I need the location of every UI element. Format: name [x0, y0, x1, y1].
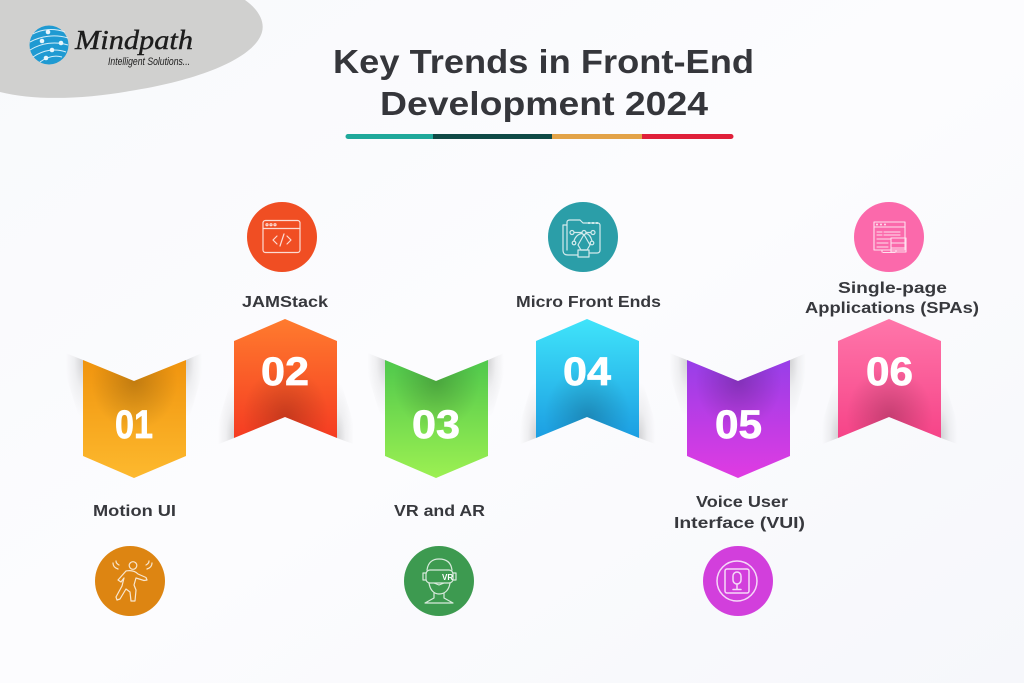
ribbon 04: 04: [563, 350, 612, 394]
ribbon 03: [385, 360, 488, 478]
logo: Mindpath globe: [30, 26, 68, 64]
ribbon 01: 01: [115, 403, 153, 447]
logo wordmark: Mindpath: [74, 25, 193, 55]
icon: walking person: [95, 546, 165, 616]
icon: VR headset: VR: [442, 573, 453, 582]
label: Single-page: [838, 280, 947, 297]
title: [333, 44, 754, 123]
ribbon 06: 06: [866, 350, 913, 394]
icon: voice assistant microphone: [703, 546, 773, 616]
step 04: Micro Front Ends: [513, 202, 663, 447]
icon: monitor with code and server: [854, 202, 924, 272]
step 03: VR and AR: [360, 350, 511, 616]
logo tagline: Intelligent Solutions...: [108, 56, 190, 68]
label: Micro Front Ends: [516, 294, 661, 311]
title underline: [346, 134, 734, 139]
logo panel: grey ellipse: [0, 0, 263, 98]
label: [805, 280, 979, 317]
label: Applications (SPAs): [805, 300, 979, 317]
ribbon 01: [83, 360, 186, 478]
icon: VR headset: [404, 546, 474, 616]
label: [674, 494, 805, 532]
step 01: Motion UI: [58, 350, 209, 616]
icon: code window: [247, 202, 317, 272]
ribbon 02: 02: [261, 350, 309, 394]
title: Key Trends in Front-End: [333, 44, 754, 81]
ribbon 02: [234, 319, 337, 438]
label: Interface (VUI): [674, 515, 805, 532]
ribbon 03: 03: [412, 403, 460, 447]
title: Development 2024: [380, 86, 708, 123]
ribbon 04: [536, 319, 639, 438]
label: JAMStack: [242, 294, 328, 311]
step 05: Voice User Interface: [662, 350, 813, 616]
step 02: JAMStack: [211, 202, 361, 447]
step 06: Single-page Applications: [805, 202, 979, 447]
ribbon 05: [687, 360, 790, 478]
icon: design window with vector pen: [548, 202, 618, 272]
ribbon 06: [838, 319, 941, 438]
label: VR and AR: [394, 503, 485, 520]
label: Motion UI: [93, 503, 176, 520]
label: Voice User: [696, 494, 788, 511]
ribbon 05: 05: [715, 403, 762, 447]
